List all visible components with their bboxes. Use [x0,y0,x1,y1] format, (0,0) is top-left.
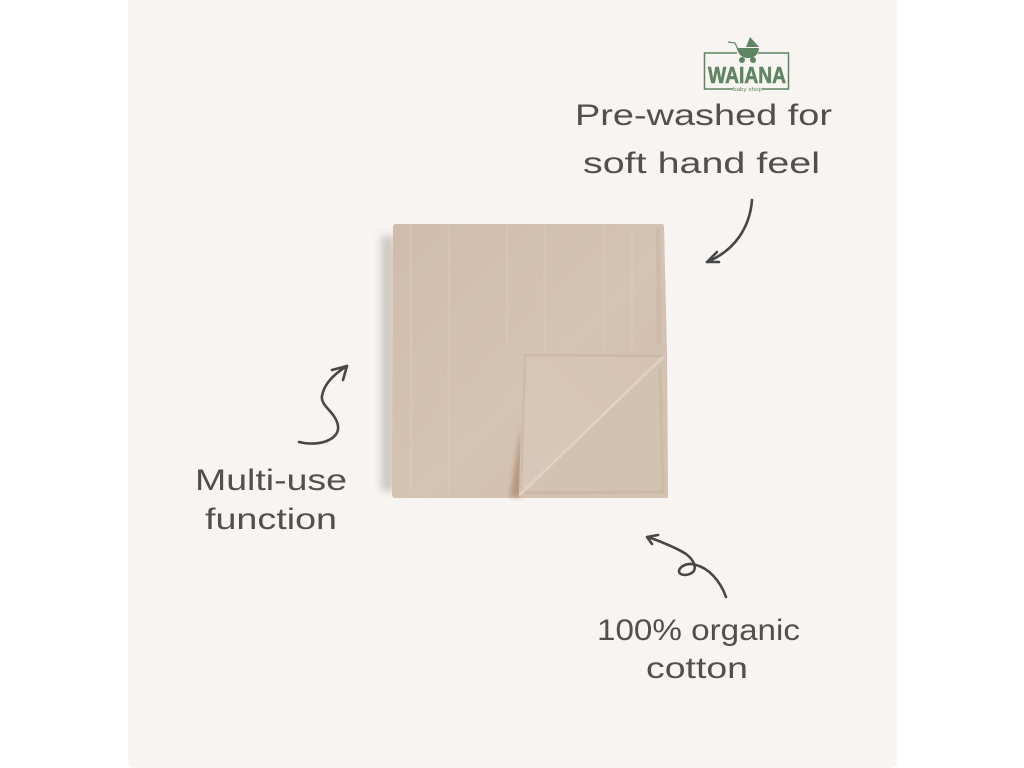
cloth side hem [657,228,660,345]
cloth: folded muslin square [381,224,668,498]
callout text line 2: function [205,503,337,536]
arrow: pre-washed [707,200,752,262]
cloth shadow [381,236,395,491]
callout text line 2: soft hand feel [583,147,820,180]
fold flap [519,352,666,497]
callout text line 1: Pre-washed for [575,99,832,132]
fold crease highlight [520,356,664,495]
under-fold panel [519,354,668,498]
callout text line 2: cotton [646,652,748,685]
fold hems [521,355,663,493]
logo pram icon [728,37,759,63]
callout text line 1: Multi-use [195,464,347,497]
callout: pre-washed [575,99,832,180]
background panel [128,0,897,768]
callout: organic cotton [597,614,800,685]
logo wordmark: WAIANA [708,62,786,88]
arrow: organic cotton [647,535,726,597]
logo frame [704,53,788,89]
callout text line 1: 100% organic [597,614,800,647]
cloth body [392,224,668,498]
arrow: multi-use [299,366,347,444]
callout: multi-use [195,464,347,536]
cloth weave lines [411,226,632,494]
fold shadow [510,425,522,497]
logo tagline: baby shop [733,87,762,93]
logo: Waiana baby shop [704,37,788,93]
